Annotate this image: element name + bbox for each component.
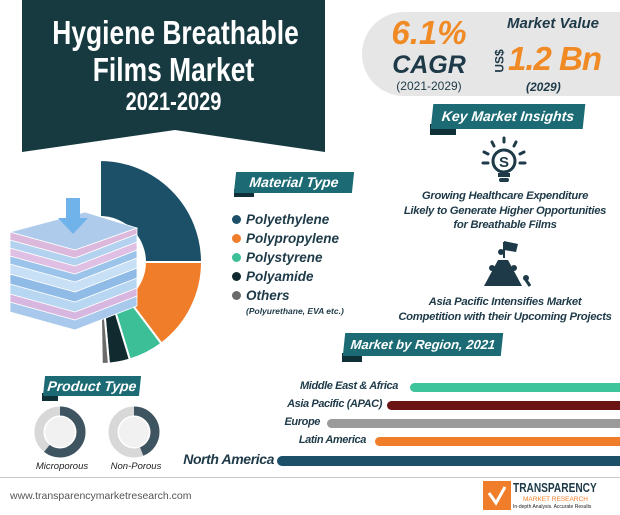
icon: bulb dollar: S [499,154,509,171]
CAGR: 6.1% [391,14,467,51]
insight 2 text [398,296,612,322]
market value [493,15,601,94]
title text: 2021-2029 [126,88,221,116]
tag: market by region [342,333,504,362]
logo: MARKET RESEARCH [523,496,588,503]
stats pill: (2029) [526,80,561,94]
logo: In-depth Analysis. Accurate Results [513,504,591,510]
icon: bulb dollar [482,136,526,182]
legend: Polyamide [246,269,314,284]
bar chart: region: Europe [284,416,320,428]
insight 2 text: Asia Pacific Intensifies Market [429,296,581,308]
donut: microporous [34,406,88,472]
bar chart: region: Latin America [299,434,366,446]
stats pill: US$ [493,49,507,73]
CAGR [391,14,467,93]
insight 1 text: for Breathable Films [453,219,557,231]
legend [232,212,344,316]
logo: TRANSPARENCY [513,480,597,495]
title text: Hygiene Breathable [52,14,299,51]
tag: product type: Product Type [47,378,137,394]
bar chart: region: Asia Pacific (APAC) [287,398,382,410]
films stack image [10,198,138,330]
title text: Films Market [93,51,254,88]
bar chart: region: North America [183,451,274,467]
insight 2 text: Competition with their Upcoming Projects [398,310,612,322]
legend: Others [246,288,290,303]
footer url: www.transparencymarketresearch.com [10,490,191,502]
market value: Market Value [507,15,599,32]
icon: climbers [484,241,532,287]
CAGR: CAGR [392,51,466,79]
title panel [22,0,325,152]
donut: non-porous: Non-Porous [111,461,161,472]
CAGR: (2021-2029) [396,79,462,93]
legend: (Polyurethane, EVA etc.) [246,306,344,316]
insight 1 text: Likely to Generate Higher Opportunities [404,204,606,216]
tag: material type: Material Type [249,174,339,190]
insight 1 text: Growing Healthcare Expenditure [422,190,588,202]
legend: Polyethylene [246,212,329,227]
bar chart: region [183,380,620,467]
tag: product type [42,376,142,401]
donut: microporous: Microporous [36,461,88,472]
legend: Polystyrene [246,250,323,265]
insight 1 text [404,190,606,231]
title text [52,14,299,116]
tag: material type [234,172,354,197]
legend: Polypropylene [246,231,339,246]
tag: market by region: Market by Region, 2021 [350,337,496,352]
bar chart: region: Middle East & Africa [300,380,398,392]
stats pill [362,12,620,96]
tag: key market insights: Key Market Insights [441,108,575,124]
donut chart: material type [101,161,201,363]
stats pill: 1.2 Bn [508,40,601,77]
logo [483,480,597,510]
donut: non-porous [108,406,162,472]
tag: key market insights [430,104,586,135]
